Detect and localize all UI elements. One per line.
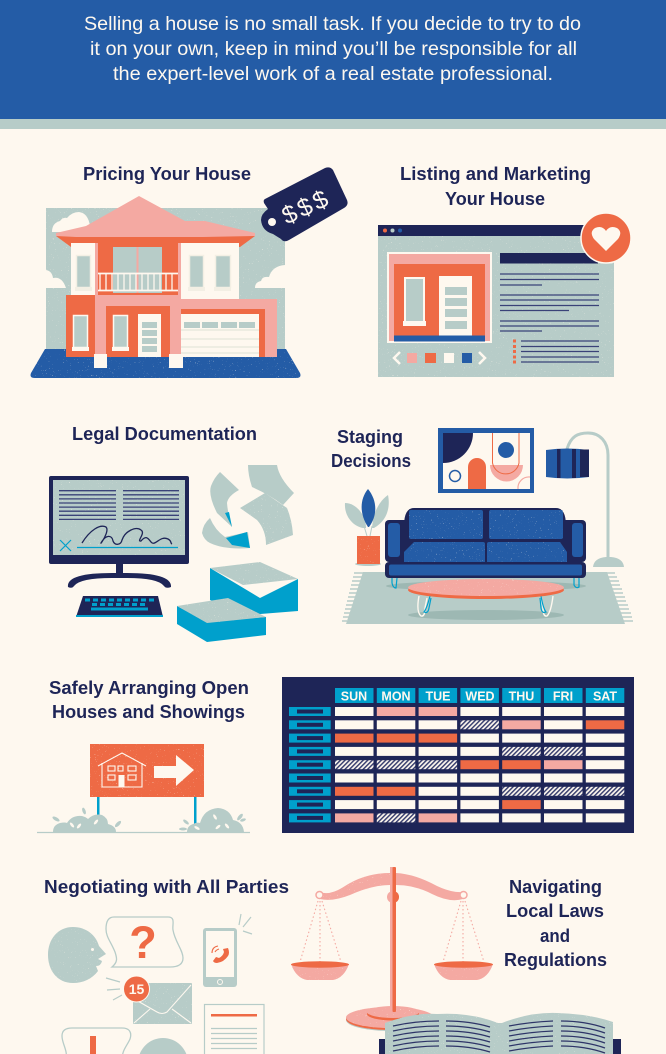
illustration: scales (291, 867, 493, 1031)
panel: listing and marketing (378, 163, 631, 377)
weekday headers: SAT (593, 690, 617, 704)
illustration: papers (202, 465, 294, 548)
heading: laws: Regulations (504, 949, 607, 970)
illustration: browser window (378, 213, 631, 377)
calendar grid (282, 677, 634, 833)
panel: staging decisions (331, 426, 633, 624)
weekday headers: THU (509, 690, 534, 704)
coffee table (408, 579, 564, 616)
icon: phone (203, 914, 252, 987)
icon: price tag (261, 167, 348, 241)
heading: pricing: Pricing Your House (83, 163, 251, 184)
icon: price tag: $$$ (278, 184, 335, 230)
illustration: paper stacks (177, 562, 298, 642)
icon: second head (138, 1038, 188, 1054)
intro text: Selling a house is no small task. If you decide to try to do (84, 13, 581, 35)
balcony railing (98, 274, 178, 290)
heading: laws: Local Laws (506, 900, 604, 921)
heading: laws: and (540, 925, 570, 946)
document (204, 1004, 264, 1054)
intro text (84, 13, 581, 85)
row labels (289, 707, 331, 822)
floor lamp (546, 433, 624, 567)
heading: staging: Decisions (331, 450, 411, 471)
heading: laws (504, 876, 607, 970)
illustration: house (30, 196, 300, 378)
keyboard (76, 596, 163, 617)
panel: navigating local laws (291, 867, 621, 1054)
bushes (52, 807, 246, 832)
heading: listing (400, 163, 591, 209)
sofa (385, 508, 586, 588)
panel: safely arranging open houses (37, 677, 250, 832)
heading: listing: Listing and Marketing (400, 163, 591, 184)
illustration: computer (49, 476, 189, 617)
intro text: it on your own, keep in mind you’ll be responsible for all (90, 38, 577, 60)
heading: showings: Safely Arranging Open (49, 677, 249, 698)
speech bubble: exclamation (62, 1028, 131, 1054)
weekday headers: MON (381, 690, 411, 704)
speech bubble: question: ? (129, 917, 157, 968)
heading: listing: Your House (445, 188, 545, 209)
icon: speaking head (48, 927, 106, 983)
notification badge (106, 976, 150, 1002)
intro text: the expert-level work of a real estate professional. (113, 63, 553, 85)
heading: laws: Navigating (509, 876, 602, 897)
weekday headers: SUN (341, 690, 367, 704)
rug (342, 572, 633, 624)
heading: showings: Houses and Showings (52, 701, 245, 722)
illustration: open book (379, 1013, 621, 1054)
heading: staging: Staging (337, 426, 403, 447)
panel: legal documentation (49, 423, 298, 642)
plant (345, 489, 389, 566)
panel: negotiating with all parties (44, 876, 289, 1054)
heading: staging (331, 426, 411, 471)
speech bubble: question (106, 917, 183, 968)
notification badge: 15 (129, 981, 144, 997)
heading: negotiating: Negotiating with All Parties (44, 876, 289, 897)
scale base (346, 1006, 434, 1031)
weekday headers: WED (465, 690, 495, 704)
weekday headers: TUE (426, 690, 450, 704)
weekday headers: FRI (553, 690, 573, 704)
wall art (438, 428, 534, 493)
icon: envelope (133, 983, 192, 1024)
schedule cells (335, 707, 624, 822)
heading: legal: Legal Documentation (72, 423, 257, 444)
header banner (0, 0, 666, 129)
panel: pricing your house (30, 163, 348, 378)
weekday headers (335, 688, 624, 704)
icon: heart badge (581, 213, 631, 263)
heading: showings (49, 677, 249, 722)
illustration: yard sign (37, 744, 250, 832)
